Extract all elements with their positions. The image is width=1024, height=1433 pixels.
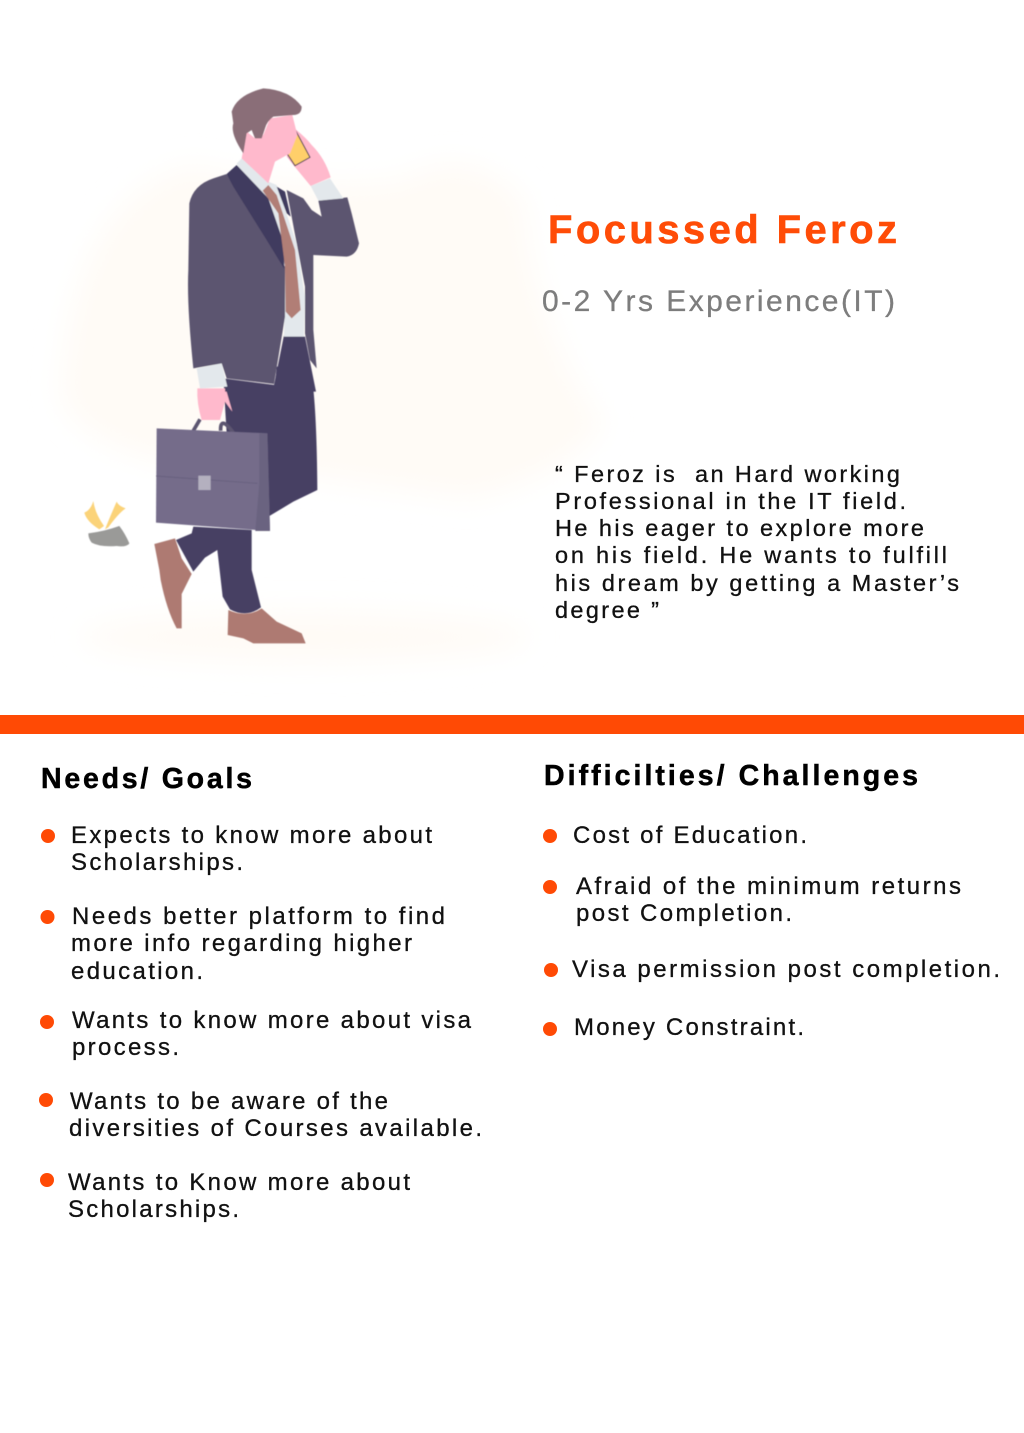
list item 4: diversities of Courses available. [69,1115,482,1142]
list item 2 [40,903,445,985]
lower body and briefcase [84,367,317,643]
upper body [188,88,359,392]
jacket [188,174,285,384]
quote: degree ” [555,597,659,623]
background blob [60,164,605,663]
icon: rock with flame [84,501,129,546]
quote: his dream by getting a Master’s [555,570,959,596]
list item 1 [41,822,432,876]
challenge item 3: Visa permission post completion. [572,956,1000,983]
raised hand [287,129,331,186]
neck and face [242,115,297,183]
shirt [237,158,305,337]
challenge item 2: Afraid of the minimum returns [576,873,961,900]
quote: Professional in the IT field. [555,488,906,514]
bag handle [193,419,233,433]
list item 2: education. [71,958,203,985]
list item 2: Needs better platform to find [72,903,445,930]
shoes [154,538,306,643]
quote: “ Feroz is an Hard working [555,461,900,487]
trousers waist [225,335,316,392]
challenge item 1: Cost of Education. [573,822,807,849]
quote: He his eager to explore more [555,515,924,541]
challenge item 2 [543,873,961,927]
sleeve and far jacket [287,190,359,368]
illustration: businessman on phone [84,88,359,643]
list item 3: Wants to know more about visa [72,1007,472,1034]
list item 1: Scholarships. [71,849,243,876]
list item 1: Expects to know more about [71,822,432,849]
list item 3 [40,1007,472,1061]
lapels [227,165,291,268]
title: Focussed Feroz [548,208,897,252]
shirt sleeve cuff [311,178,343,201]
list item 4 [39,1088,482,1142]
orange divider bar [0,715,1024,734]
quote: on his field. He wants to fulfill [555,542,947,568]
list item 5: Scholarships. [68,1196,239,1223]
quote [555,461,959,623]
heading: difficulties/challenges: Difficilties/ Challenges [544,760,918,792]
list item 5: Wants to Know more about [68,1169,410,1196]
subtitle: 0-2 Yrs Experience(IT) [542,285,895,318]
trousers [176,367,317,613]
challenge item 2: post Completion. [576,900,792,927]
list item 4: Wants to be aware of the [70,1088,388,1115]
heading: needs/goals: Needs/ Goals [41,763,252,795]
hair [232,88,302,153]
challenge item 4: Money Constraint. [574,1014,804,1041]
briefcase [156,428,270,531]
panel: needs and goals [39,763,482,1223]
panel: difficulties and challenges [543,760,1000,1041]
list item 2: more info regarding higher [71,930,412,957]
left cuff [197,363,227,388]
hand holding bag [197,388,232,420]
tie [263,185,301,318]
phone [287,131,310,166]
list item 3: process. [72,1034,179,1061]
list item 5 [40,1169,410,1223]
